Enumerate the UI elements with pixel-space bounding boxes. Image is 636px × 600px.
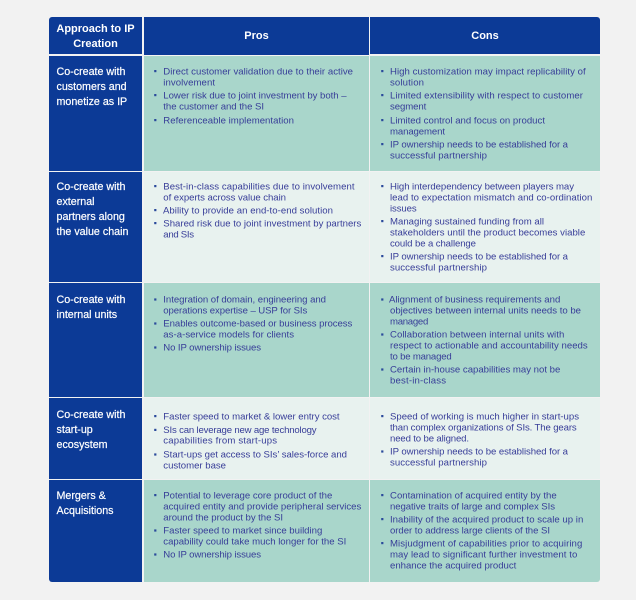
row 1 pros list [154,66,353,126]
row 5 pros list: Potential to leverage core product of the [163,490,332,501]
row 2 label cell [49,172,142,282]
row 4 cons list: Speed of working is much higher in start-ups [390,411,579,422]
row 1 label: customers and [56,81,127,93]
row 3 cons list: Certain in-house capabilities may not be [390,365,560,376]
row 1 cons cell [370,56,600,171]
row 5 cons list: order to address large clients of the SI [390,525,550,536]
row 4 pros list: Start-ups get access to SIs’ sales-force and [163,450,347,461]
row 5 pros list: acquired entity and provide peripheral services [163,501,362,512]
row 5 label: Mergers & [56,490,106,502]
row 1 label: monetize as IP [56,96,127,108]
row 1 pros list: Lower risk due to joint investment by both – [163,90,347,101]
row 1 cons list [381,66,586,161]
row 3 label: internal units [56,309,117,321]
heading: approach to IP creation [56,22,135,50]
row 3 pros list [154,295,353,354]
row 2 cons list: lead to expectation mismatch and co-ordination [390,192,592,203]
header: approach [49,17,142,54]
row 2 label: partners along [56,211,125,223]
row 3 label cell [49,283,142,397]
row 1 cons list: IP ownership needs to be established for a [390,139,569,150]
row 2 cons list: successful partnership [390,262,487,273]
heading: approach to IP creation: Approach to IP [56,22,135,34]
row 5 cons list [381,490,583,571]
row 2 cons list: IP ownership needs to be established for a [390,251,569,262]
row 1 cons list: Limited control and focus on product [390,115,545,126]
row 3 cons list: objectives between internal units needs to be [390,306,581,317]
row 4 cons list: successful partnership [390,458,487,469]
row 2 cons list: High interdependency between players may [390,181,574,192]
row 5 pros list: capability could take much longer for the SI [163,537,346,548]
row 5 cons list: Misjudgment of capabilities prior to acquiring [390,538,582,549]
header: pros [144,17,369,55]
row 3 cons list: managed [390,317,428,328]
row 5 cons list: Inability of the acquired product to scale up in [390,514,583,525]
row 4 cons cell [370,398,600,479]
row 5 pros list [154,490,362,561]
row 5 pros cell [144,480,369,582]
row 5 label: Acquisitions [56,505,114,517]
row 3 label [56,294,125,321]
heading: approach to IP creation: Creation [73,38,118,50]
row 3 pros list: as-a-service models for clients [163,330,294,341]
row 2 pros list [154,181,362,240]
row 1 label cell [49,56,142,171]
row 3 label: Co-create with [56,294,125,306]
row 3 cons list: to be managed [390,352,452,363]
row 4 pros list [154,411,347,472]
row 2 pros list: and SIs [163,229,194,240]
row 2 cons list: could be a challenge [390,238,476,249]
row 4 cons list [381,411,579,469]
row 5 cons list: Contamination of acquired entity by the [390,490,557,501]
row 2 pros list: of experts across value chain [163,192,286,203]
row 3 pros list: operations expertise – USP for SIs [163,306,308,317]
heading: cons: Cons [471,30,499,42]
row 2 cons list [381,181,592,273]
row 1 pros list: Direct customer validation due to their active [163,66,353,77]
row 3 pros cell [144,283,369,397]
row 1 cons list: successful partnership [390,150,487,161]
row 2 pros list: Shared risk due to joint investment by partners [163,218,362,229]
row 4 cons list: need to be aligned. [390,434,469,445]
row 1 cons list: High customization may impact replicability of [390,66,586,77]
row 4 pros cell [144,398,369,479]
row 5 cons list: may lead to significant further investment to [390,549,577,560]
row 1 cons list: segment [390,101,427,112]
row 1 pros list: involvement [163,77,215,88]
row 2 cons list: Managing sustained funding from all [390,216,544,227]
row 4 label: start-up [56,424,93,436]
row 4 pros list: capabilities from start-ups [163,436,277,447]
row 3 pros list: Enables outcome-based or business process [163,319,353,330]
row 1 pros list: the customer and the SI [163,101,264,112]
row 1 label: Co-create with [56,66,125,78]
row 1 pros cell [144,56,369,171]
row 5 label [56,490,114,517]
row 3 pros list: No IP ownership issues [163,343,261,354]
row 2 label: external [56,196,95,208]
heading: pros: Pros [244,30,269,42]
row 5 pros list: Faster speed to market since building [163,526,322,537]
row 3 cons list [381,295,588,387]
row 5 pros list: around the product by the SI [163,513,283,524]
row 3 cons list: Alignment of business requirements and [389,295,560,306]
header: cons [370,17,600,54]
row 5 pros list: No IP ownership issues [163,550,261,561]
row 2 pros list: Ability to provide an end-to-end solution [163,205,333,216]
row 2 label [56,181,128,238]
row 2 cons list: issues [390,203,417,214]
row 3 pros list: Integration of domain, engineering and [163,295,326,306]
row 2 label: Co-create with [56,181,125,193]
row 3 cons list: respect to actionable and accountability needs [390,341,588,352]
row 4 label [56,409,125,451]
row 4 label cell [49,398,142,479]
row 2 cons list: stakeholders until the product becomes viable [390,227,585,238]
row 4 label: Co-create with [56,409,125,421]
row 4 cons list: IP ownership needs to be established for a [390,447,569,458]
row 4 cons list: than complex organizations of SIs. The gears [390,423,577,434]
row 1 cons list: management [390,126,445,137]
row 5 label cell [49,480,142,582]
row 5 cons list: negative traits of large and complex SIs [390,501,555,512]
row 5 cons list: enhance the acquired product [390,560,517,571]
row 1 label [56,66,127,108]
row 2 pros list: Best-in-class capabilities due to involvement [163,181,355,192]
row 2 cons cell [370,172,600,282]
row 2 label: the value chain [56,226,128,238]
row 2 pros cell [144,172,369,282]
row 5 cons cell [370,480,600,582]
row 4 label: ecosystem [56,439,108,451]
row 3 cons list: Collaboration between internal units with [390,330,564,341]
row 1 pros list: Referenceable implementation [163,115,294,126]
row 1 cons list: Limited extensibility with respect to customer [390,90,584,101]
row 1 cons list: solution [390,77,424,88]
row 3 cons list: best-in-class [390,376,446,387]
row 4 pros list: customer base [163,461,226,472]
row 3 cons cell [370,283,600,397]
row 4 pros list: SIs can leverage new age technology [163,425,317,436]
row 4 pros list: Faster speed to market & lower entry cost [163,411,340,422]
